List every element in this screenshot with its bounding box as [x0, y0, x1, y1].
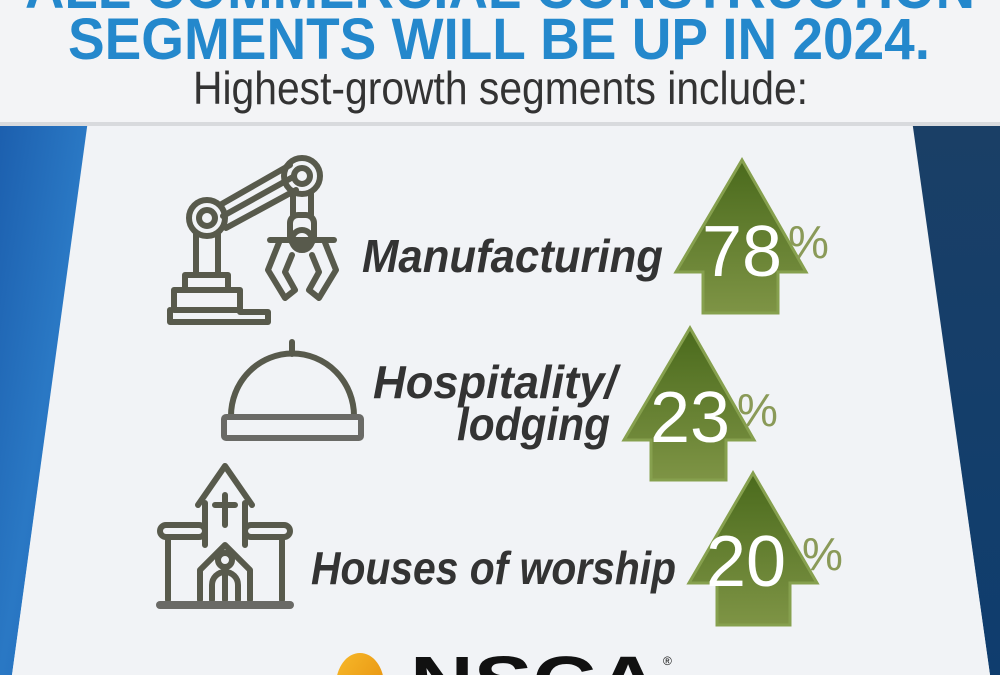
- icon: robot arm: [170, 158, 336, 322]
- arrow 78%: %: [788, 216, 829, 268]
- arrow 23%: %: [737, 384, 778, 436]
- logo: NSCA: ®: [663, 654, 672, 668]
- title: SEGMENTS WILL BE UP IN 2024.: [68, 7, 930, 72]
- label: Hospitality/lodging: lodging: [457, 398, 610, 450]
- label: Hospitality/lodging: Hospitality/: [373, 356, 621, 408]
- subtitle: Highest-growth segments include:: [193, 62, 808, 114]
- label: Hospitality/lodging: [373, 356, 621, 450]
- logo: NSCA: [337, 653, 672, 675]
- arrow 23%: 23: [650, 378, 730, 458]
- arrow 20%: [689, 473, 843, 625]
- arrow 78%: 78: [702, 212, 782, 292]
- central panel: [12, 418, 990, 675]
- icon: church: [160, 466, 290, 605]
- label: Houses of worship: Houses of worship: [311, 542, 676, 594]
- arrow 23%: [624, 328, 778, 480]
- icon: cloche: [224, 342, 361, 438]
- header banner: [0, 0, 1000, 126]
- arrow 20%: 20: [706, 522, 786, 602]
- label: Manufacturing: Manufacturing: [362, 230, 663, 282]
- arrow 20%: %: [802, 528, 843, 580]
- title: [26, 0, 972, 60]
- arrow 78%: [676, 160, 829, 313]
